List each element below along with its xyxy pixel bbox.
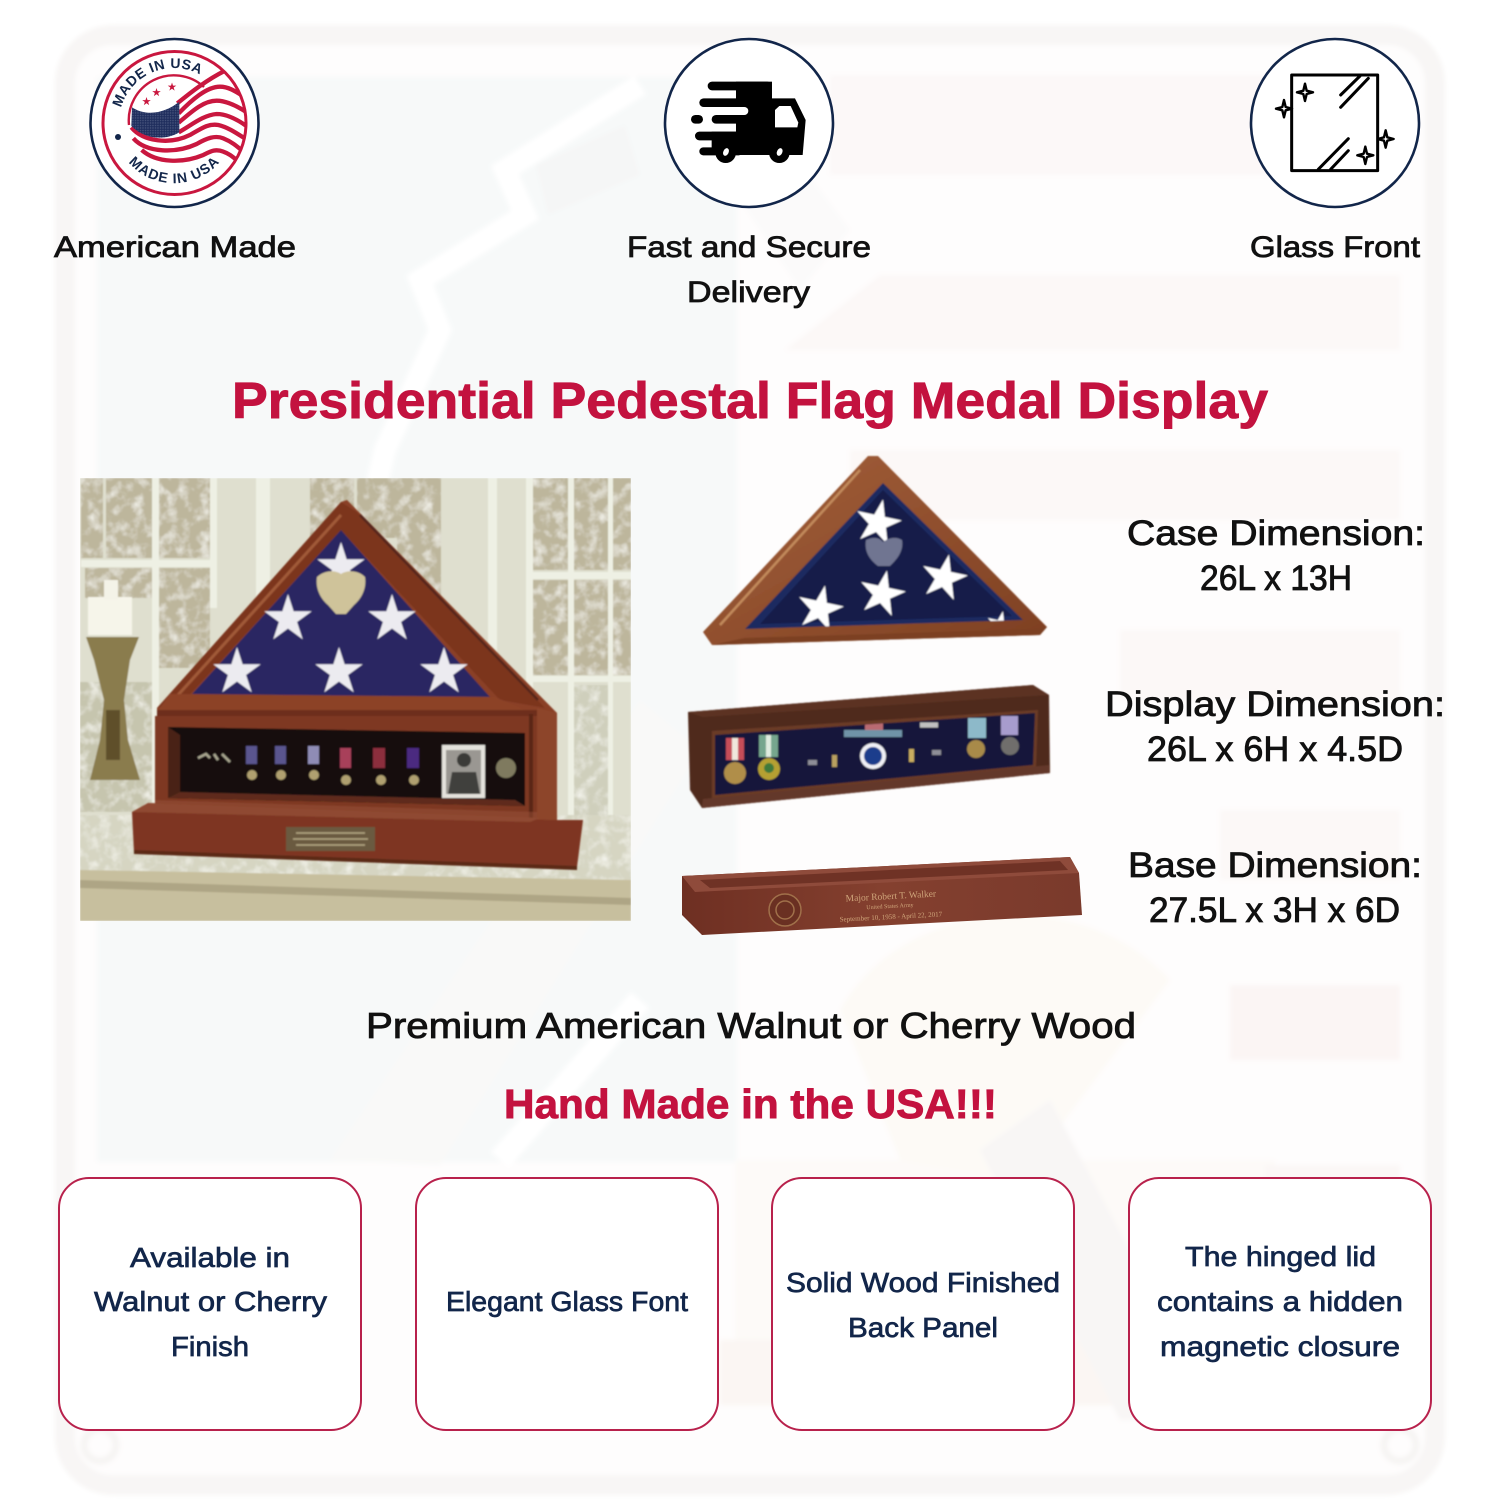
window panes bbox=[80, 478, 631, 815]
label: Fast and Secure Delivery bbox=[627, 231, 871, 309]
image: medal display case bbox=[688, 685, 1050, 808]
image: engraved base: United States Army bbox=[866, 903, 914, 911]
eagle bbox=[866, 538, 902, 566]
card: glass bbox=[416, 1178, 718, 1430]
icon: made in usa seal: MADE IN USA bbox=[112, 58, 200, 107]
card: finish: Available in bbox=[130, 1242, 290, 1273]
folded flag bbox=[192, 530, 490, 697]
text: case dimension: Case Dimension: bbox=[1127, 514, 1425, 553]
badge: Fast and Secure Delivery bbox=[627, 39, 871, 309]
text: base dimension bbox=[1128, 846, 1422, 930]
medals bbox=[198, 746, 419, 785]
portrait photo bbox=[442, 745, 485, 798]
lower frame band bbox=[162, 694, 473, 706]
card: hinged lid bbox=[1129, 1178, 1431, 1430]
icon: made in usa seal bbox=[89, 38, 260, 208]
card: hinged lid: magnetic closure bbox=[1160, 1331, 1400, 1362]
label: American Made: American Made bbox=[54, 231, 296, 264]
card: back panel bbox=[772, 1178, 1074, 1430]
text: display dimension bbox=[1105, 685, 1445, 769]
card: finish: Finish bbox=[171, 1331, 249, 1362]
card: back panel: Back Panel bbox=[848, 1312, 998, 1343]
card: finish: Walnut or Cherry bbox=[94, 1286, 327, 1317]
title: Presidential Pedestal Flag Medal Display bbox=[232, 372, 1269, 429]
image: engraved base bbox=[682, 857, 1082, 935]
marine emblem bbox=[496, 758, 516, 778]
text: premium wood: Premium American Walnut or Cherry Wood bbox=[366, 1005, 1136, 1046]
text: hand made: Hand Made in the USA!!! bbox=[504, 1081, 997, 1127]
label: Fast and Secure Delivery: Delivery bbox=[687, 276, 810, 309]
icon: delivery truck bbox=[665, 39, 833, 207]
text: display dimension: Display Dimension: bbox=[1105, 685, 1445, 724]
badge: American Made bbox=[53, 38, 296, 264]
card: glass: Elegant Glass Font bbox=[446, 1286, 688, 1317]
image: engraved base: Major Robert T. Walker bbox=[845, 890, 937, 904]
photo: pedestal flag case on window sill bbox=[80, 478, 631, 921]
label: Glass Front: Glass Front bbox=[1250, 231, 1421, 264]
medal case bbox=[155, 716, 537, 820]
case peak frame bbox=[157, 500, 557, 722]
medals bbox=[724, 716, 1019, 784]
text: case dimension: 26L x 13H bbox=[1200, 559, 1352, 598]
card: back panel: Solid Wood Finished bbox=[786, 1267, 1060, 1298]
text: case dimension bbox=[1127, 514, 1425, 598]
text: base dimension: 27.5L x 3H x 6D bbox=[1149, 891, 1400, 930]
card: finish bbox=[59, 1178, 361, 1430]
brass plaque bbox=[286, 827, 375, 851]
label: Fast and Secure Delivery: Fast and Secure bbox=[627, 231, 871, 264]
image: engraved base: September 10, 1958 - April 22, 2017 bbox=[839, 910, 943, 924]
candle holder bbox=[88, 597, 132, 635]
eagle emblem bbox=[317, 571, 365, 614]
card: hinged lid: contains a hidden bbox=[1157, 1286, 1403, 1317]
badge: Glass Front bbox=[1250, 39, 1421, 264]
text: base dimension: Base Dimension: bbox=[1128, 846, 1422, 885]
text: display dimension: 26L x 6H x 4.5D bbox=[1147, 730, 1403, 769]
icon: glass pane bbox=[1251, 39, 1419, 207]
base bbox=[132, 803, 583, 867]
icon: made in usa seal: MADE IN USA bbox=[129, 156, 220, 184]
image: flag case bbox=[703, 456, 1047, 645]
window sill bbox=[80, 815, 631, 880]
card: hinged lid: The hinged lid bbox=[1185, 1241, 1376, 1272]
